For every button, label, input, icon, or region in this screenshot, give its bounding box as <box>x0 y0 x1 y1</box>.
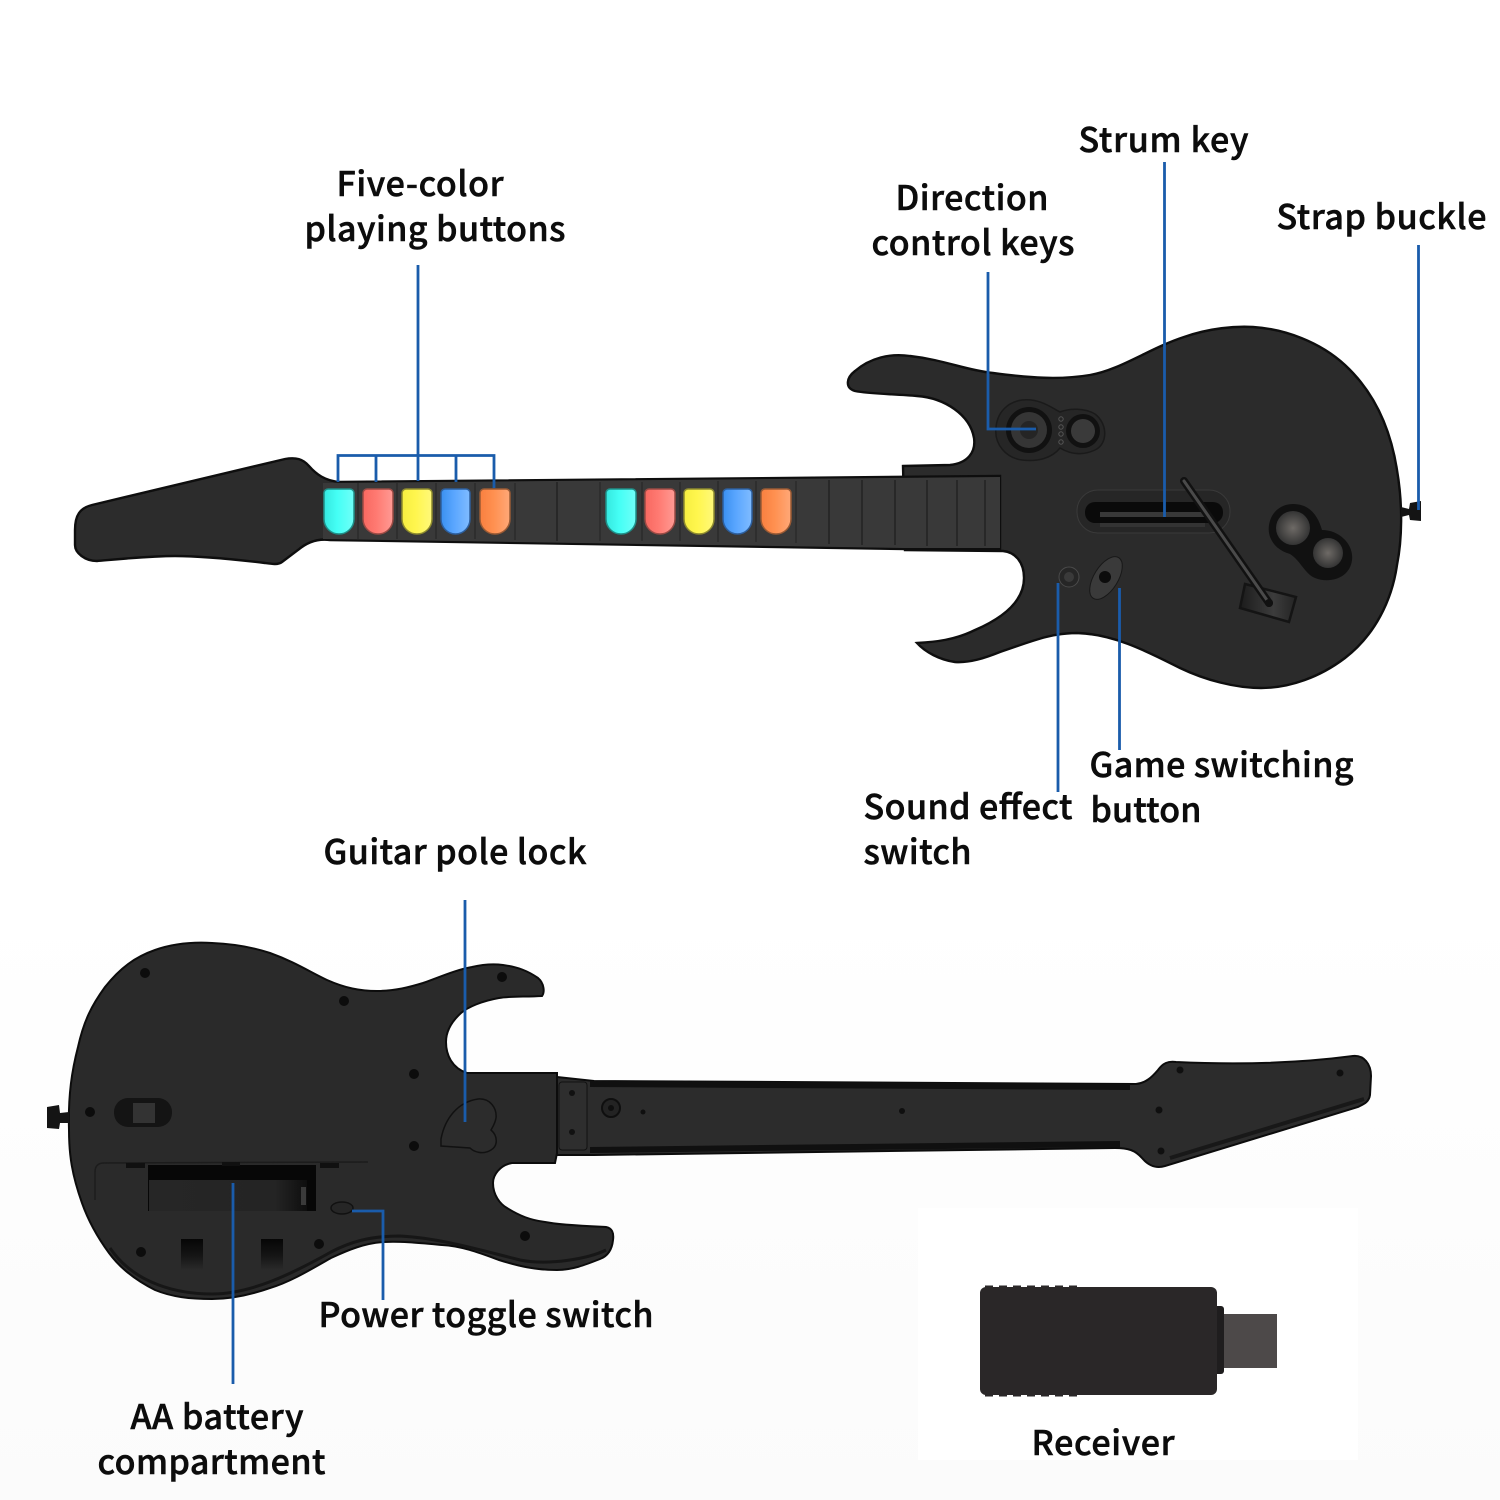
label: power toggle switch: Power toggle switch <box>318 1288 654 1337</box>
label: AA battery compartment: compartment <box>98 1435 326 1484</box>
back guitar <box>47 943 1371 1299</box>
front guitar neck and headstock <box>75 458 1000 564</box>
label: AA battery compartment <box>98 1390 326 1484</box>
label: game switching button <box>1090 738 1354 832</box>
label: five-color playing buttons: Five-color <box>336 157 504 206</box>
back guitar neck and headstock <box>557 1056 1371 1167</box>
strum key <box>1077 490 1230 533</box>
game switching button <box>1083 551 1129 605</box>
receiver grip ridges <box>985 1287 1078 1395</box>
five-color buttons, first set <box>324 489 510 534</box>
rear body buttons <box>1269 504 1352 580</box>
back guitar body <box>69 943 613 1299</box>
label: strum key: Strum key <box>1078 113 1249 162</box>
label: game switching button: button <box>1090 783 1202 832</box>
receiver collar <box>1214 1306 1224 1374</box>
receiver plug <box>1222 1314 1277 1368</box>
sound effect switch <box>1059 567 1079 587</box>
label: guitar pole lock: Guitar pole lock <box>324 825 587 874</box>
lower body edge shadow <box>110 1236 606 1294</box>
receiver dongle <box>980 1287 1277 1395</box>
receiver body <box>980 1287 1217 1395</box>
strap slot <box>114 1098 172 1127</box>
five-color buttons, second set <box>606 489 791 534</box>
strap buckle <box>1401 501 1421 521</box>
label: direction control keys: control keys <box>872 216 1074 265</box>
power toggle switch <box>331 1202 353 1214</box>
body screws <box>85 968 530 1257</box>
battery compartment <box>126 1162 339 1211</box>
guitar pole lock <box>441 1099 496 1153</box>
label: sound effect switch <box>864 780 1072 874</box>
label: direction control keys: Direction <box>896 171 1048 220</box>
neck plate <box>559 1082 587 1150</box>
strap peg <box>47 1105 69 1129</box>
panel: receiver backdrop <box>918 1208 1358 1460</box>
clip holes <box>181 1239 283 1270</box>
label: five-color playing buttons: playing buttons <box>304 202 566 251</box>
label: AA battery compartment: AA battery <box>130 1390 304 1439</box>
battery cover <box>95 1162 368 1200</box>
front guitar <box>75 327 1421 688</box>
label: five-color playing buttons <box>304 157 566 251</box>
whammy bar <box>1184 481 1296 622</box>
neck screws <box>602 1066 1344 1154</box>
leader lines <box>233 162 1418 1384</box>
label: sound effect switch: Sound effect <box>864 780 1072 829</box>
front guitar body <box>848 327 1401 688</box>
neck shadow edges <box>590 1084 1364 1158</box>
fretboard <box>323 477 1000 548</box>
label: direction control keys <box>872 171 1074 265</box>
direction joystick and dots <box>996 400 1105 460</box>
label: sound effect switch: switch <box>864 825 972 874</box>
label: game switching button: Game switching <box>1090 738 1354 787</box>
label: strap buckle: Strap buckle <box>1276 190 1486 239</box>
label: receiver: Receiver <box>1032 1416 1175 1465</box>
